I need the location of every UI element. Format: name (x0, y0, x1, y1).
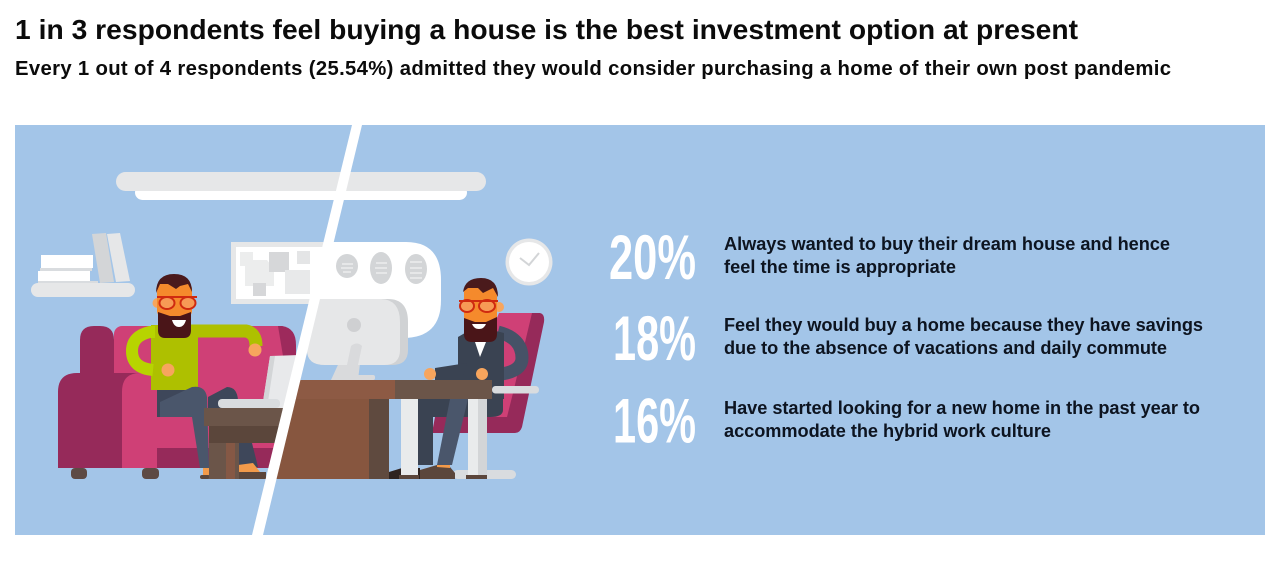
sofa (58, 326, 296, 479)
title: 1 in 3 respondents feel buying a house is the best investment option at present (15, 13, 1079, 45)
floor base (453, 470, 516, 479)
wall clock (506, 238, 552, 286)
man at desk (389, 278, 522, 479)
glasses (459, 300, 498, 312)
shirt (475, 342, 486, 357)
stat text (724, 315, 1203, 358)
stat: 18%: 18% (613, 304, 696, 374)
head (494, 302, 504, 312)
stat text: Always wanted to buy their dream house and hence (724, 234, 1170, 254)
pinned notes (336, 252, 427, 284)
office chair (432, 313, 544, 433)
wall map (231, 242, 326, 304)
shoes (389, 468, 420, 479)
stat text (724, 398, 1200, 441)
back leg and shoe (208, 387, 238, 408)
panel: blue background (15, 125, 1265, 535)
small table (204, 408, 283, 479)
suit (458, 330, 504, 399)
armrest (492, 386, 539, 394)
subtitle: Every 1 out of 4 respondents (25.54%) admitted they would consider purchasing a home of their own post pandemic (15, 58, 1171, 80)
head (152, 298, 162, 308)
man on sofa (132, 274, 266, 479)
stat: 16% (613, 386, 1200, 456)
trousers (157, 390, 197, 417)
monitor (307, 299, 408, 380)
glasses (157, 297, 197, 309)
stat text: Feel they would buy a home because they have savings (724, 315, 1203, 335)
laptop (218, 355, 300, 408)
big desk body (268, 399, 389, 479)
back arm (490, 332, 522, 375)
desk legs (399, 399, 487, 479)
lime sweater (151, 325, 198, 390)
stat: 18% (613, 304, 1203, 374)
stat: 16%: 16% (613, 386, 696, 456)
bookshelf with books (31, 233, 135, 297)
illustration: home and office scene (31, 125, 552, 535)
hands (248, 344, 262, 356)
ceiling lamp (116, 172, 486, 200)
stat text: Have started looking for a new home in the past year to (724, 398, 1200, 418)
stat: 20% (609, 223, 1170, 293)
stat text (724, 234, 1170, 277)
stat text: accommodate the hybrid work culture (724, 421, 1051, 441)
diagonal divider (252, 125, 362, 535)
stat text: feel the time is appropriate (724, 257, 956, 277)
hands (424, 368, 436, 380)
trousers and legs (418, 399, 503, 465)
white pin board (310, 242, 441, 338)
big desk top (296, 380, 492, 399)
stat: 20%: 20% (609, 223, 696, 293)
stat text: due to the absence of vacations and daily commute (724, 338, 1167, 358)
